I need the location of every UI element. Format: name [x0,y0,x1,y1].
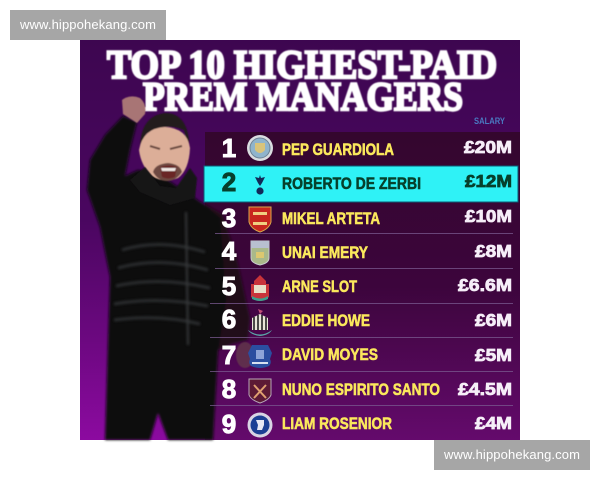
icon: Chelsea crest [248,412,272,438]
icon: Tottenham crest [255,175,265,195]
row 9: LIAM ROSENIOR [282,415,392,433]
photo: celebrating manager [87,96,254,440]
row 1: £20M [464,137,512,157]
row 2 highlighted [204,166,518,202]
row 5: £6.6M [458,275,512,295]
row 8: £4.5M [458,379,512,399]
watermark: bottom right: www.hippohekang.com [443,447,580,462]
row 4: UNAI EMERY [282,244,368,262]
icon: Newcastle crest [248,309,272,336]
row 6: EDDIE HOWE [282,312,370,330]
row 9: £4M [475,413,512,433]
row 7 [222,340,512,370]
row 3: 3 [222,203,236,233]
icon: West Ham crest [249,379,271,403]
fist [122,96,145,123]
title: PREM MANAGERS [143,74,463,119]
row 5: ARNE SLOT [282,278,357,296]
row 9 [222,409,512,439]
row 3: MIKEL ARTETA [282,210,380,228]
icon: Manchester City crest [247,135,273,161]
title [107,42,497,119]
row 6: 6 [222,304,236,334]
icon: Liverpool crest [251,275,269,301]
icon: Arsenal crest [249,207,271,232]
row 1 [222,133,512,163]
row 7: £5M [475,345,512,365]
salary column heading: SALARY [474,116,506,127]
row 5 [222,271,512,301]
hand at right [236,342,254,368]
watermark: top left [10,10,166,40]
row 7: DAVID MOYES [282,346,378,364]
row 2 highlighted: ROBERTO DE ZERBI [282,175,421,193]
jacket quilting [114,212,210,345]
row 4: £8M [475,241,512,261]
title: TOP 10 HIGHEST-PAID [107,42,497,87]
row 4: 4 [222,236,237,266]
row 7: 7 [222,340,236,370]
row 1: 1 [222,133,236,163]
row 5: 5 [222,271,236,301]
row 8: NUNO ESPIRITO SANTO [282,381,440,399]
collar [130,167,197,205]
row separators [210,234,513,406]
row 2 highlighted: 2 [222,167,236,197]
row 2 highlighted: £12M [465,171,512,191]
watermark: bottom right [434,440,590,470]
row 8: 8 [222,374,236,404]
panel: infographic background [80,40,520,440]
icon: Everton crest [248,345,272,368]
table: manager rankings [204,133,518,439]
row 6: £6M [475,310,512,330]
row 4 [222,236,512,266]
row 8 [222,374,512,404]
row 9: 9 [222,409,236,439]
head [139,113,190,181]
row 3 [222,203,512,233]
row 1: PEP GUARDIOLA [282,141,394,159]
row 3: £10M [465,206,512,226]
watermark: top left: www.hippohekang.com [19,17,156,32]
row 6 [222,304,512,336]
panel: table rows background [205,132,520,440]
icon: Aston Villa crest [251,241,269,265]
